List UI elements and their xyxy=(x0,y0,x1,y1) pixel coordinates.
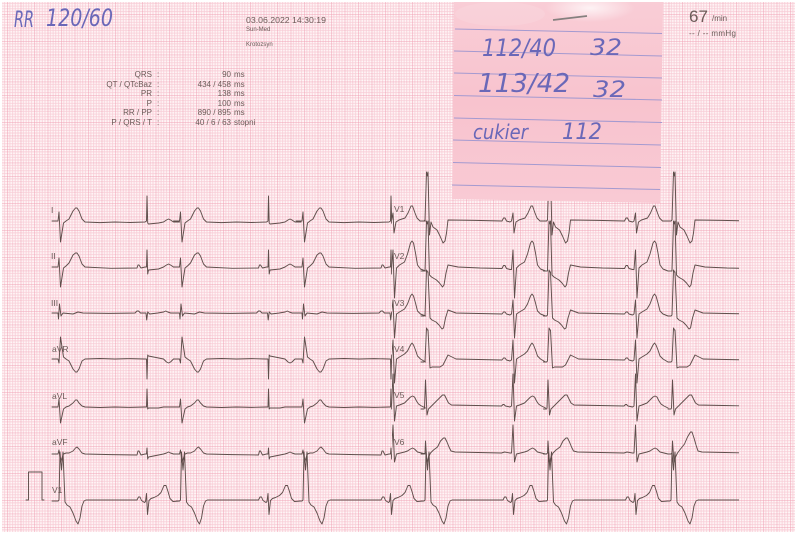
date and clinic header: 03.06.2022 14:30:19 xyxy=(246,16,327,25)
measurement table: 100 xyxy=(218,99,232,108)
lead V1 trace xyxy=(392,172,739,244)
handwritten blood pressure note: 120/60 xyxy=(46,4,113,32)
handwritten reading 2: 32 xyxy=(593,78,626,103)
handwritten glucose note: 112 xyxy=(562,120,602,145)
measurement table xyxy=(106,70,256,127)
note ruled lines xyxy=(452,29,662,190)
lead labels: aVR xyxy=(52,344,69,354)
heart rate readout xyxy=(689,7,736,38)
handwritten glucose note: cukier xyxy=(473,120,530,144)
date and clinic header: Krotozsyn xyxy=(246,42,273,48)
lead I trace xyxy=(52,196,424,242)
measurement table: stopni xyxy=(234,118,256,127)
handwritten reading 1: 112/40 xyxy=(482,34,556,62)
measurement table: : xyxy=(157,118,159,127)
lead labels: V1 xyxy=(394,204,405,214)
stapled pink note xyxy=(452,0,663,203)
measurement table: 90 xyxy=(222,70,232,79)
lead II trace xyxy=(52,250,424,287)
measurement table: ms xyxy=(234,80,245,89)
lead aVF trace xyxy=(52,447,424,462)
date and clinic header xyxy=(246,16,327,48)
lead V2 trace xyxy=(392,220,739,298)
measurement table: 40 / 6 / 63 xyxy=(195,118,232,127)
lead labels: aVL xyxy=(52,391,67,401)
measurement table: : xyxy=(157,70,159,79)
lead V6 trace xyxy=(392,424,739,464)
measurement table: P xyxy=(147,99,152,108)
handwritten reading 1: 32 xyxy=(590,36,622,61)
measurement table: P / QRS / T xyxy=(111,118,152,127)
lead labels: V3 xyxy=(394,298,405,308)
lead aVL trace xyxy=(52,389,424,423)
measurement table: ms xyxy=(234,70,245,79)
lead labels: aVF xyxy=(52,437,68,447)
heart rate readout: /min xyxy=(712,14,727,23)
lead labels: I xyxy=(51,205,53,215)
measurement table: 890 / 895 xyxy=(198,108,232,117)
handwritten glucose note xyxy=(473,120,602,145)
lead aVR trace xyxy=(52,337,424,379)
limb leads traces xyxy=(52,196,424,462)
lead labels: V4 xyxy=(394,344,405,354)
measurement table: : xyxy=(157,99,159,108)
measurement table: RR / PP xyxy=(123,108,152,117)
handwritten blood pressure note xyxy=(14,4,113,33)
handwritten blood pressure note: RR xyxy=(14,8,34,33)
date and clinic header: Sun-Med xyxy=(246,27,270,33)
measurement table: 138 xyxy=(218,89,232,98)
heart rate readout: 67 xyxy=(689,7,708,26)
measurement table: ms xyxy=(234,108,245,117)
lead labels: V6 xyxy=(394,437,405,447)
lead V5 trace xyxy=(392,374,739,422)
lead labels: II xyxy=(51,251,56,261)
lead V3 trace xyxy=(392,270,739,338)
heart rate readout: -- / -- mmHg xyxy=(689,29,736,38)
lead V4 trace xyxy=(392,328,739,384)
measurement table: : xyxy=(157,89,159,98)
measurement table: ms xyxy=(234,89,245,98)
calibration pulse xyxy=(26,472,44,500)
lead labels: III xyxy=(51,298,58,308)
measurement table: QRS xyxy=(135,70,152,79)
handwritten reading 1 xyxy=(482,34,622,62)
lead labels: V2 xyxy=(394,251,405,261)
measurement table: QT / QTcBaz xyxy=(106,80,152,89)
rhythm strip V1 trace xyxy=(52,452,792,524)
handwritten reading 2: 113/42 xyxy=(478,69,570,99)
lead labels xyxy=(51,204,405,495)
staple xyxy=(553,16,587,20)
lead labels: V5 xyxy=(394,390,405,400)
measurement table: : xyxy=(157,80,159,89)
measurement table: PR xyxy=(141,89,152,98)
measurement table: ms xyxy=(234,99,245,108)
lead labels: V1 xyxy=(52,485,63,495)
measurement table: : xyxy=(157,108,159,117)
lead III trace xyxy=(52,304,424,320)
measurement table: 434 / 458 xyxy=(198,80,232,89)
chest leads traces xyxy=(392,172,739,464)
handwritten reading 2 xyxy=(478,69,626,103)
